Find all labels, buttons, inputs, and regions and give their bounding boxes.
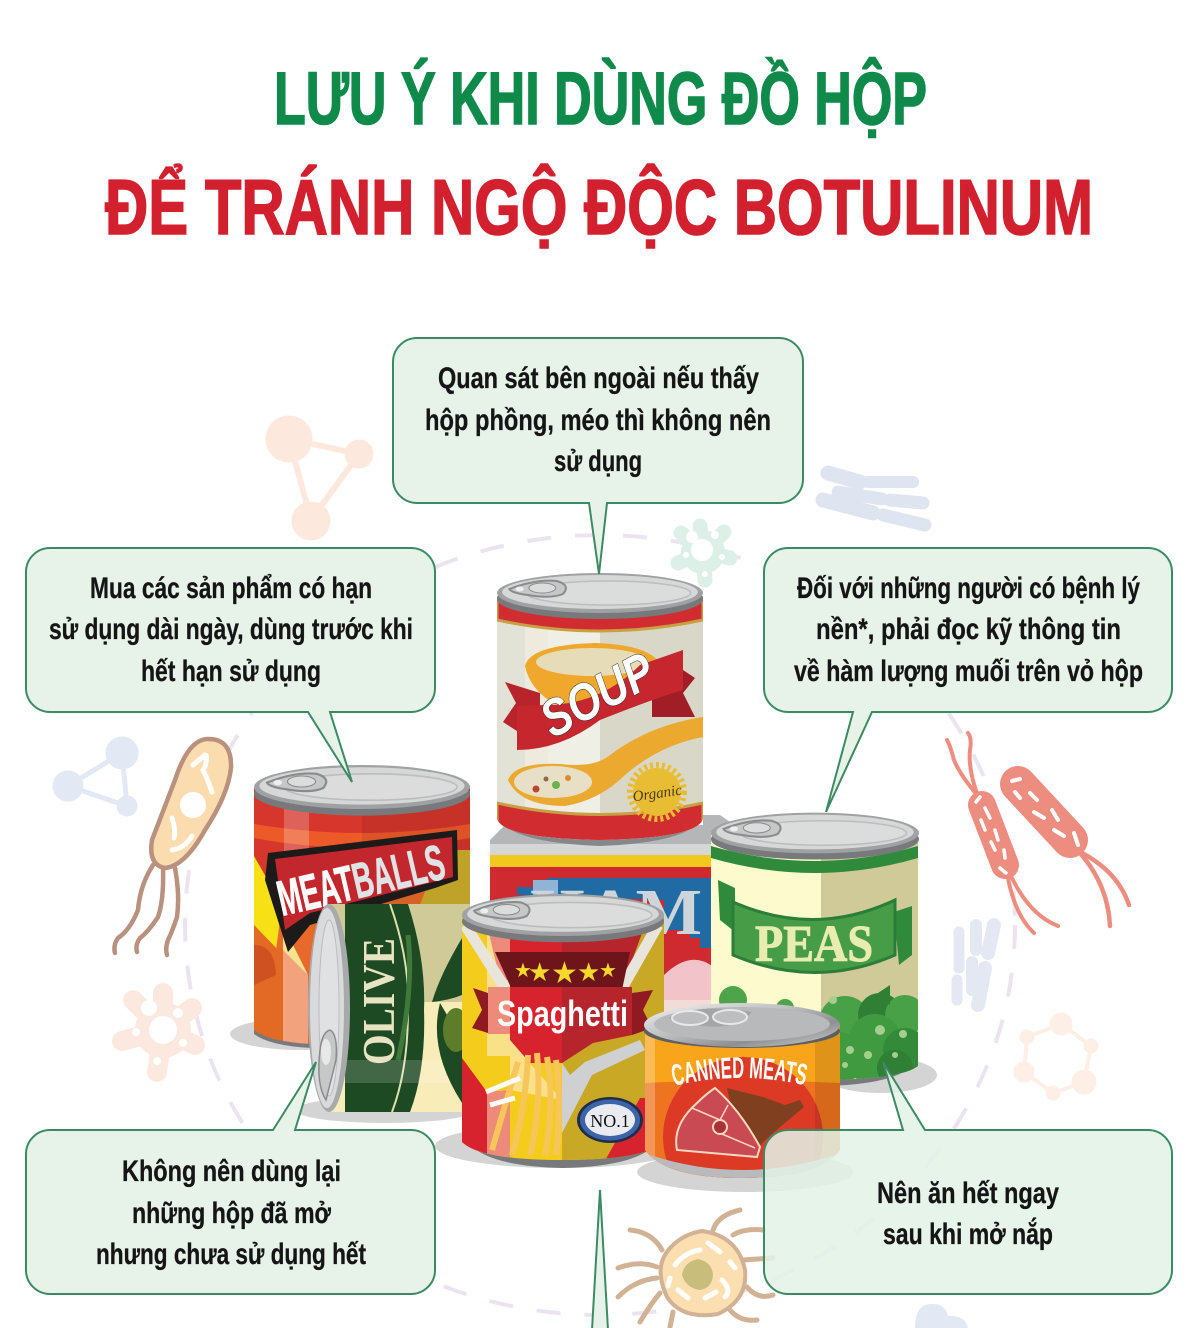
- icon: blue rods right: [957, 925, 994, 1005]
- callout text: Nên ăn hết ngay: [877, 1177, 1059, 1210]
- title line 1: LƯU Ý KHI DÙNG ĐỒ HỘP: [274, 57, 927, 140]
- callout text: sau khi mở nắp: [883, 1217, 1053, 1251]
- shadow: canned meats: [637, 1152, 853, 1192]
- stars: ★: [577, 958, 600, 988]
- shadow: peas can: [823, 1057, 937, 1093]
- ham meat: [676, 1088, 804, 1157]
- icon: blue molecule left: [53, 737, 138, 816]
- organic seal: [630, 765, 684, 819]
- icon: red bacterium two: [1012, 779, 1129, 926]
- callout text: nền*, phải đọc kỹ thông tin: [816, 613, 1121, 646]
- can: peas: PEAS: [755, 916, 873, 973]
- stars: ★: [599, 958, 617, 982]
- icon: orange bacterium left: [114, 739, 231, 955]
- dashed circle decoration: [185, 535, 1015, 1315]
- can: canned meats: [644, 1003, 840, 1178]
- callout text: [794, 572, 1143, 688]
- no.1 badge: [577, 1097, 643, 1143]
- stars: ★: [514, 958, 532, 982]
- icon: green star cell: [678, 526, 730, 580]
- callout text: [49, 572, 413, 688]
- callout text: những hộp đã mở: [132, 1197, 332, 1230]
- can: olive on its side: [308, 904, 470, 1112]
- icon: peach hexagon molecule: [1014, 1013, 1098, 1100]
- callout text: nhưng chưa sử dụng hết: [96, 1238, 366, 1271]
- icon: blue rods top right: [823, 473, 925, 525]
- icon: spider cell bottom: [618, 1210, 773, 1327]
- organic seal: Organic: [632, 783, 683, 805]
- callout text: Quan sát bên ngoài nếu thấy: [438, 362, 759, 395]
- callout: right: [764, 548, 1172, 812]
- icon: red bacterium one: [947, 733, 1058, 933]
- can: spaghetti: Spaghetti: [497, 993, 628, 1034]
- callout text: Mua các sản phẩm có hạn: [90, 572, 372, 605]
- can: spaghetti: [462, 894, 664, 1168]
- callout text: sử dụng dài ngày, dùng trước khi: [49, 613, 413, 646]
- can: olive on its side: OLIVE: [353, 938, 404, 1065]
- callout: top: [393, 338, 803, 574]
- callout text: sử dụng: [554, 445, 642, 478]
- can: meatballs: MEATBALLS: [272, 834, 450, 927]
- callout text: [877, 1177, 1059, 1251]
- icon: peach molecule top left: [266, 416, 373, 540]
- callout text: [96, 1155, 366, 1271]
- no.1 badge: NO.1: [590, 1111, 630, 1131]
- can: canned meats: CANNED MEATS: [672, 1057, 808, 1085]
- noodles: [486, 1053, 559, 1155]
- callout text: [425, 362, 771, 478]
- icon: blue blob bottom: [915, 1304, 968, 1328]
- callout: bottom left: [26, 1062, 435, 1294]
- icon: peach star cell left: [122, 993, 195, 1072]
- can: ham: HAM: [530, 876, 702, 949]
- callout text: hộp phồng, méo thì không nên: [425, 404, 771, 437]
- stars: ★: [528, 958, 551, 988]
- pea pile: [719, 985, 918, 1080]
- can: soup: SOUP: [531, 642, 664, 749]
- stars: ★: [551, 956, 578, 991]
- shadow: meatballs can: [230, 1018, 370, 1050]
- can: ham: [490, 815, 730, 1012]
- stars: [514, 956, 617, 991]
- title: [105, 57, 1093, 251]
- shadow: spaghetti can: [435, 1124, 685, 1168]
- can: peas: [711, 813, 927, 1086]
- callout: bottom right: [764, 1062, 1172, 1294]
- can: soup: [497, 573, 703, 846]
- shadow: olive can: [295, 1097, 475, 1123]
- callout: left: [26, 548, 435, 782]
- can: meatballs: [254, 765, 470, 1050]
- arrow: pointer of next callout: [592, 1190, 608, 1328]
- callout text: hết hạn sử dụng: [141, 655, 321, 688]
- callout text: Không nên dùng lại: [122, 1155, 341, 1188]
